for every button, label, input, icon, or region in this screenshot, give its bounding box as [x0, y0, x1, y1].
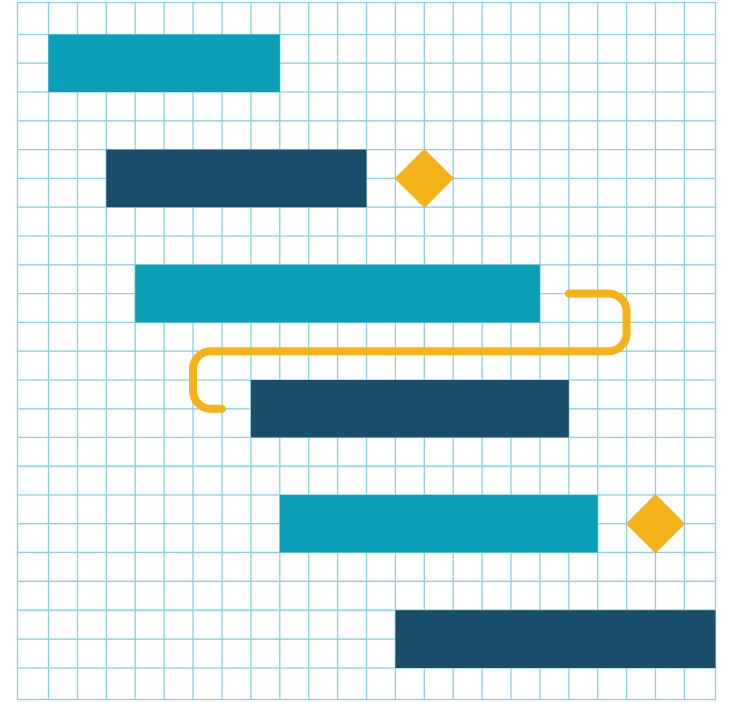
- milestone diamond 1: [395, 149, 454, 208]
- milestone diamond 2: [626, 494, 685, 553]
- bar 1: [48, 34, 280, 92]
- dependency connector arrow: [193, 294, 627, 409]
- bar 5: [280, 495, 598, 552]
- bar 3: [135, 265, 540, 322]
- bar 4: [251, 380, 569, 437]
- bar 2: [106, 150, 367, 207]
- bar 6: [395, 610, 716, 668]
